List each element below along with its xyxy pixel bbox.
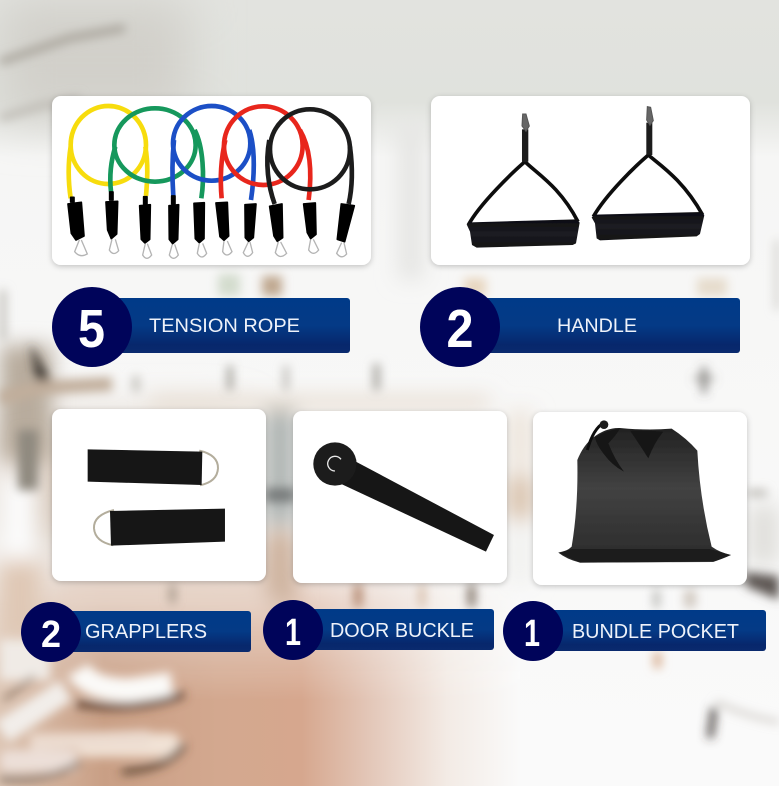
label: 5 tension rope: 5 xyxy=(78,299,105,359)
label: 1 bundle pocket xyxy=(503,601,766,661)
label: 1 bundle pocket: 1 xyxy=(524,613,540,655)
illustration: two black foam handles xyxy=(467,107,704,248)
panel: grapplers photo xyxy=(52,409,266,581)
label: 2 grapplers xyxy=(21,602,251,662)
label: 2 handle xyxy=(420,287,740,367)
label: 2 grapplers: GRAPPLERS xyxy=(85,621,207,643)
illustration: black drawstring bag xyxy=(558,420,731,563)
panel: door buckle photo xyxy=(293,411,507,583)
label: 2 handle: HANDLE xyxy=(557,315,637,337)
panel: handle photo xyxy=(431,96,750,265)
label: 1 door buckle: 1 xyxy=(285,612,301,654)
label: 1 bundle pocket: BUNDLE POCKET xyxy=(572,621,739,643)
panel: bundle pocket photo xyxy=(533,412,747,585)
label: 5 tension rope: TENSION ROPE xyxy=(149,315,300,337)
illustration: five coloured tension ropes xyxy=(68,106,354,258)
label: 2 handle: 2 xyxy=(446,299,474,359)
label: 1 door buckle xyxy=(263,600,494,660)
panel: tension rope photo xyxy=(52,96,371,265)
illustration: door anchor strap xyxy=(313,442,494,552)
illustration: two ankle straps with D-rings xyxy=(88,449,225,546)
label: 1 door buckle: DOOR BUCKLE xyxy=(330,620,474,642)
label: 2 grapplers: 2 xyxy=(41,614,61,656)
label: 5 tension rope xyxy=(52,287,350,367)
